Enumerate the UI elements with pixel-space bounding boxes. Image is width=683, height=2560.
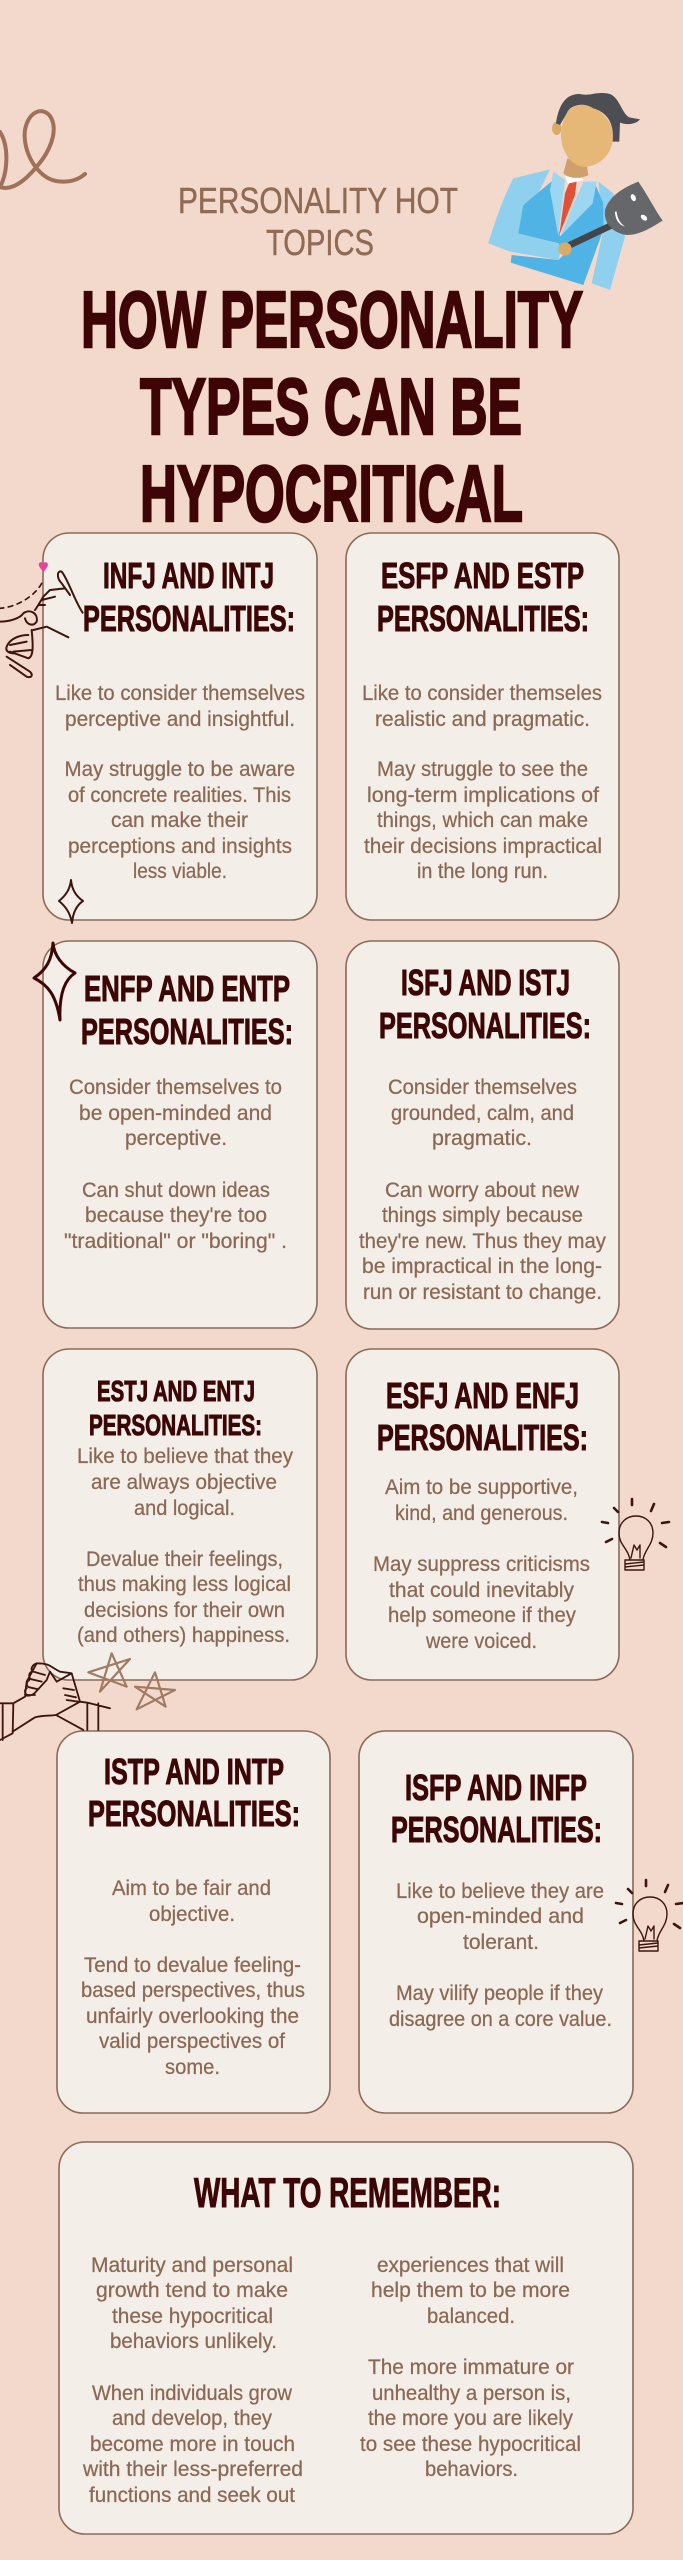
body text: be impractical in the long- (362, 1255, 602, 1278)
right column text: help them to be more (371, 2279, 570, 2302)
right column text: behaviors. (425, 2458, 518, 2481)
heading (377, 1375, 588, 1458)
right column text (360, 2254, 581, 2481)
body text: based perspectives, thus (81, 1979, 305, 2002)
body text: long-term implications of (367, 784, 599, 807)
icon: stars (88, 1653, 175, 1709)
body text: May suppress criticisms (373, 1553, 590, 1576)
body text: things, which can make (377, 809, 588, 832)
body text (77, 1445, 293, 1647)
body text: May vilify people if they (396, 1982, 603, 2005)
body text: of concrete realities. This (68, 784, 291, 807)
body text: Like to consider themseles (362, 682, 602, 705)
panel: ESFP and ESTP (346, 533, 619, 920)
body text (55, 682, 305, 883)
body text: kind, and generous. (395, 1502, 568, 1525)
body text: Like to consider themselves (55, 682, 305, 705)
heading (377, 555, 589, 639)
heading: PERSONALITIES: (81, 1011, 293, 1052)
body text: disagree on a core value. (389, 2008, 612, 2031)
body text: May struggle to be aware (64, 758, 295, 781)
body text: because they're too (85, 1204, 267, 1227)
body text: perceptive. (125, 1127, 227, 1150)
body text: less viable. (133, 860, 227, 883)
heading: PERSONALITIES: (377, 598, 589, 639)
body text: things simply because (382, 1204, 583, 1227)
heading: WHAT TO REMEMBER: (194, 2169, 501, 2216)
left column text: When individuals grow (92, 2382, 293, 2405)
body text (373, 1476, 590, 1653)
body text: perceptive and insightful. (65, 708, 295, 731)
right column text: The more immature or (368, 2356, 574, 2379)
body text: thus making less logical (78, 1573, 291, 1596)
body text (389, 1880, 612, 2031)
left column text: Maturity and personal (91, 2254, 293, 2277)
icon: pinky-promise hand with heart (0, 562, 83, 677)
body text: (and others) happiness. (77, 1624, 290, 1647)
left column text: and develop, they (112, 2407, 272, 2430)
body text: decisions for their own (84, 1599, 285, 1622)
body text: tolerant. (463, 1931, 539, 1954)
body text: run or resistant to change. (363, 1281, 602, 1304)
left column text: with their less-preferred (82, 2458, 303, 2481)
body text (64, 1076, 287, 1253)
icon: large sparkle (34, 943, 75, 1020)
heading: PERSONALITIES: (89, 1410, 262, 1442)
illustration: man holding a mask (488, 93, 663, 290)
body text: objective. (149, 1903, 235, 1926)
heading (88, 1751, 300, 1834)
left column text: functions and seek out (89, 2484, 295, 2507)
left column text: growth tend to make (96, 2279, 288, 2302)
panel: INFJ and INTJ (43, 533, 317, 920)
body text: realistic and pragmatic. (375, 708, 590, 731)
heading: PERSONALITIES: (379, 1005, 591, 1046)
body text: Like to believe they are (396, 1880, 604, 1903)
body text: can make their (111, 809, 248, 832)
body text: that could inevitably (389, 1579, 574, 1602)
body text: Devalue their feelings, (86, 1548, 283, 1571)
panel: ESFJ and ENFJ (346, 1349, 619, 1680)
body text: unfairly overlooking the (86, 2005, 299, 2028)
panel: what to remember (59, 2142, 633, 2534)
body text: Can shut down ideas (82, 1179, 270, 1202)
body text: are always objective (91, 1471, 277, 1494)
body text: perceptions and insights (68, 835, 292, 858)
panel: ESTJ and ENTJ (43, 1349, 317, 1680)
title (81, 275, 583, 538)
heading: ISFJ AND ISTJ (401, 962, 570, 1003)
body text (362, 682, 602, 883)
body text: open-minded and (417, 1905, 584, 1928)
body text (359, 1076, 606, 1304)
heading: PERSONALITIES: (377, 1417, 588, 1458)
body text: Aim to be fair and (112, 1877, 271, 1900)
panel: ISFJ and ISTJ (346, 941, 619, 1329)
subtitle: PERSONALITY HOT (178, 180, 458, 221)
body text: Tend to devalue feeling- (84, 1954, 301, 1977)
body text: Aim to be supportive, (385, 1476, 578, 1499)
heading: ISFP AND INFP (405, 1767, 587, 1808)
right column text: unhealthy a person is, (372, 2382, 571, 2405)
heading: ESFJ AND ENFJ (386, 1375, 579, 1416)
right column text: the more you are likely (368, 2407, 573, 2430)
subtitle (178, 180, 458, 263)
body text: Like to believe that they (77, 1445, 293, 1468)
subtitle: TOPICS (266, 222, 374, 263)
left column text: these hypocritical (112, 2305, 273, 2328)
body text (81, 1877, 305, 2079)
body text: valid perspectives of (99, 2030, 285, 2053)
heading (391, 1767, 602, 1850)
heading: ESFP AND ESTP (381, 555, 584, 596)
heading: PERSONALITIES: (83, 598, 295, 639)
right column text: experiences that will (377, 2254, 564, 2277)
body text: "traditional" or "boring" . (64, 1230, 287, 1253)
panel: ISFP and INFP (359, 1731, 633, 2113)
heading (83, 555, 295, 639)
left column text: become more in touch (90, 2433, 295, 2456)
body text: were voiced. (425, 1630, 537, 1653)
right column text: balanced. (427, 2305, 515, 2328)
heading (81, 968, 293, 1052)
body text: their decisions impractical (364, 835, 602, 858)
body text: help someone if they (388, 1604, 576, 1627)
body text: be open-minded and (79, 1102, 272, 1125)
body text: and logical. (134, 1497, 235, 1520)
heading (89, 1376, 262, 1442)
body text: some. (165, 2056, 220, 2079)
body text: they're new. Thus they may (359, 1230, 606, 1253)
body text: May struggle to see the (377, 758, 588, 781)
heading: ISTP AND INTP (104, 1751, 284, 1792)
body text: Can worry about new (385, 1179, 580, 1202)
heading: ESTJ AND ENTJ (97, 1376, 255, 1408)
body text: Consider themselves to (69, 1076, 282, 1099)
body text: pragmatic. (432, 1127, 532, 1150)
body text: Consider themselves (388, 1076, 577, 1099)
icon: handshake (0, 1663, 110, 1740)
heading: ENFP AND ENTP (84, 968, 290, 1009)
icon: light bulb (ESFJ panel) (602, 1499, 669, 1570)
panel: ISTP and INTP (57, 1731, 330, 2113)
left column text: behaviors unlikely. (110, 2330, 277, 2353)
heading (379, 962, 591, 1046)
heading: INFJ AND INTJ (103, 555, 274, 596)
left column text (82, 2254, 303, 2507)
heading: PERSONALITIES: (88, 1793, 300, 1834)
body text: in the long run. (417, 860, 548, 883)
body text: grounded, calm, and (391, 1102, 574, 1125)
right column text: to see these hypocritical (360, 2433, 581, 2456)
icon: light bulb (ISFP panel) (616, 1880, 683, 1951)
panel: ENFP and ENTP (43, 941, 317, 1328)
icon: small sparkle (59, 880, 83, 923)
decorative squiggle (0, 111, 85, 188)
